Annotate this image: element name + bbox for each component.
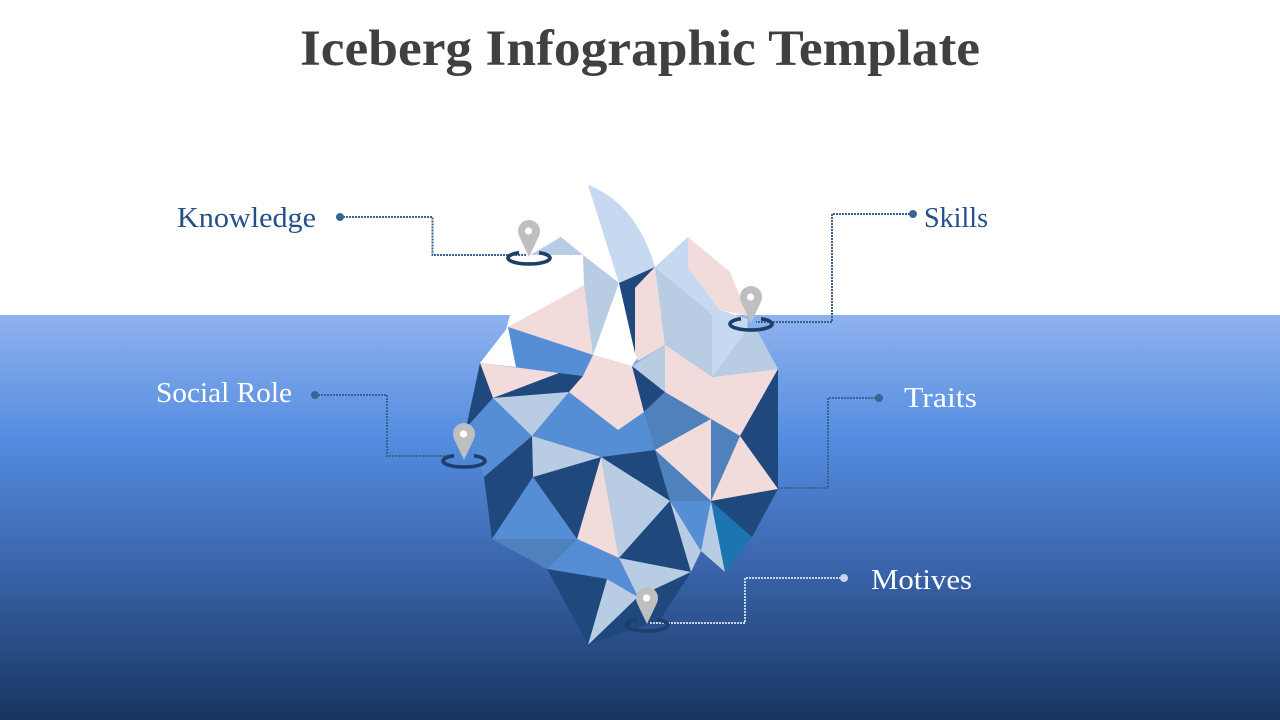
iceberg tip: above the waterline bbox=[506, 185, 778, 377]
label: Skills: Skills bbox=[924, 202, 988, 234]
connector: Knowledge bbox=[336, 213, 527, 255]
pin: Motives bbox=[626, 587, 668, 631]
water background bbox=[0, 315, 1280, 720]
pin: Skills bbox=[730, 286, 772, 330]
pin: Knowledge bbox=[508, 220, 550, 264]
label: Knowledge: Knowledge bbox=[177, 202, 316, 234]
connector: Traits bbox=[778, 394, 883, 488]
pin: Social Role bbox=[443, 423, 485, 467]
label: Traits: Traits bbox=[904, 382, 977, 414]
iceberg body: below the waterline bbox=[466, 327, 778, 645]
iceberg bbox=[466, 185, 778, 645]
connector: Social Role bbox=[311, 391, 455, 456]
label: Motives: Motives bbox=[871, 564, 972, 596]
connector: Skills bbox=[756, 210, 917, 322]
connector: Motives bbox=[650, 574, 848, 623]
title: Iceberg Infographic Template bbox=[300, 21, 980, 77]
label: Social Role: Social Role bbox=[156, 377, 292, 409]
